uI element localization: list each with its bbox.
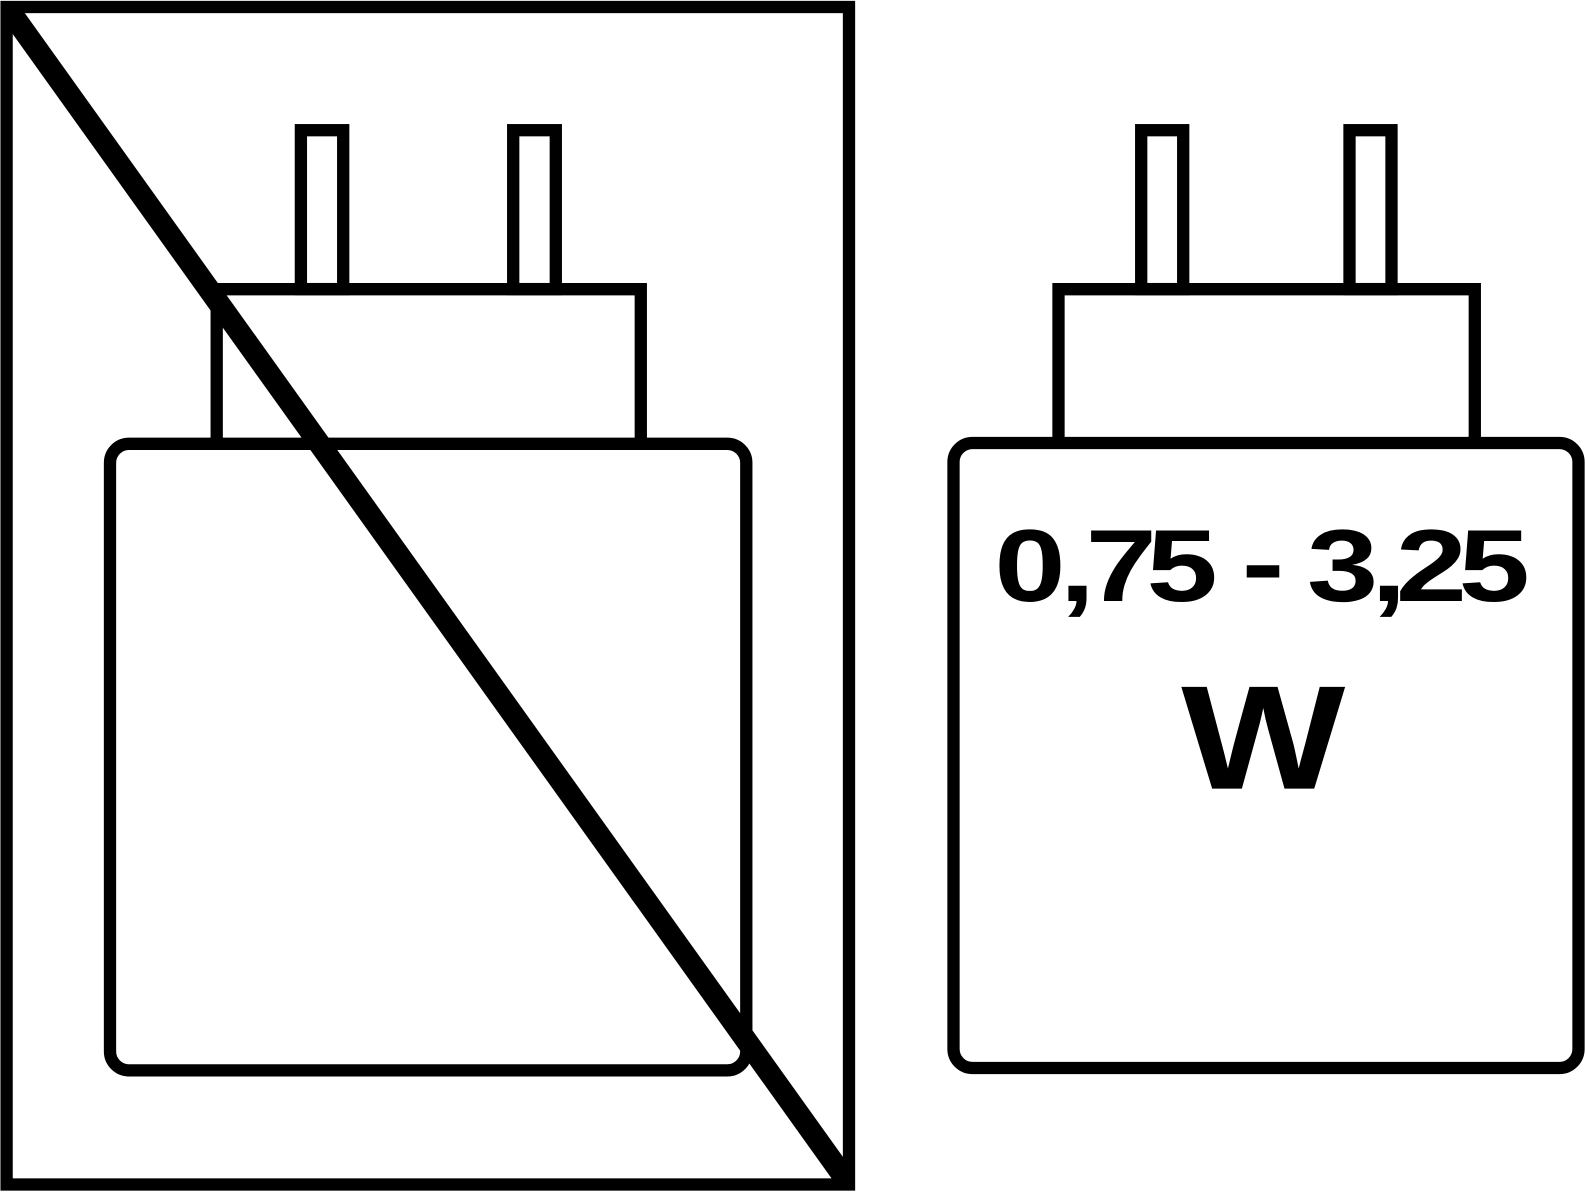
panel: crossed-out charger xyxy=(7,7,849,1184)
left pin xyxy=(301,130,343,289)
right pin xyxy=(1350,130,1392,289)
diagonal strike-through xyxy=(12,12,843,1180)
panel: charger with wattage xyxy=(954,130,1578,1068)
icon: crossed-out charger plug xyxy=(110,130,746,1070)
charger body xyxy=(110,444,746,1070)
right pin xyxy=(513,130,556,289)
wattage unit: W xyxy=(1181,656,1346,821)
left pin xyxy=(1141,130,1183,289)
plug neck xyxy=(217,289,641,444)
crossed-out frame xyxy=(7,7,849,1184)
charger body xyxy=(954,443,1578,1068)
plug neck xyxy=(1058,289,1475,443)
wattage range value: 0,75 - 3,25 xyxy=(994,505,1530,623)
icon: charger plug xyxy=(954,130,1578,1068)
